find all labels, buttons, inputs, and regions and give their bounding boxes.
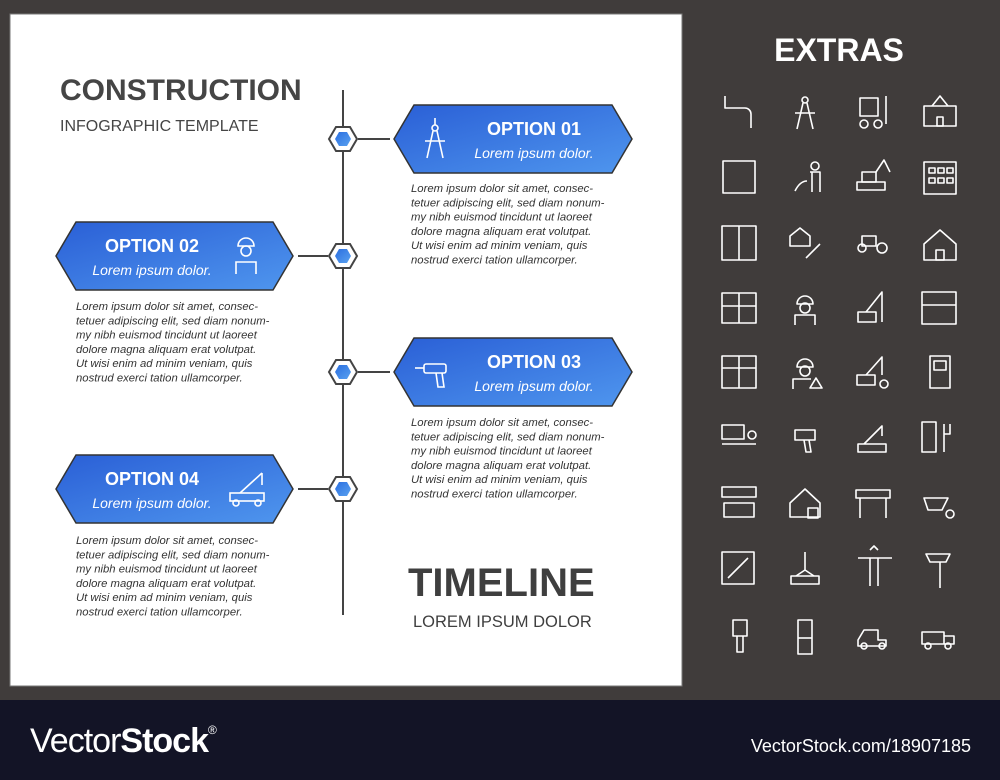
text block 01: tetuer adipiscing elit, sed diam nonum-	[411, 197, 605, 209]
text block 02: Lorem ipsum dolor sit amet, consec-	[76, 301, 258, 313]
text block 04	[76, 535, 270, 618]
title: INFOGRAPHIC TEMPLATE	[60, 118, 259, 135]
text block 04: dolore magna aliquam erat volutpat.	[76, 578, 256, 590]
text block 02	[76, 301, 270, 384]
text block 01: my nibh euismod tincidunt ut laoreet	[411, 212, 593, 224]
icon: compass	[425, 118, 445, 158]
text block 03	[411, 417, 605, 500]
text block 04: Ut wisi enim ad minim veniam, quis	[76, 592, 253, 604]
title	[60, 74, 302, 135]
icon grid: extras	[722, 96, 956, 654]
icon: worker	[236, 238, 256, 274]
option 03: OPTION 03	[487, 352, 581, 372]
text block 03: nostrud exerci tation ullamcorper.	[411, 488, 578, 500]
footer bar: ®	[208, 723, 217, 737]
text block 03: my nibh euismod tincidunt ut laoreet	[411, 446, 593, 458]
option 03: Lorem ipsum dolor.	[474, 378, 594, 394]
option 01	[394, 105, 632, 173]
text block 04: my nibh euismod tincidunt ut laoreet	[76, 564, 258, 576]
text block 01: Ut wisi enim ad minim veniam, quis	[411, 240, 588, 252]
option 02: OPTION 02	[105, 236, 199, 256]
extras heading: EXTRAS	[774, 32, 904, 68]
text block 03: Ut wisi enim ad minim veniam, quis	[411, 474, 588, 486]
option 04: Lorem ipsum dolor.	[92, 495, 212, 511]
timeline heading: LOREM IPSUM DOLOR	[413, 613, 592, 631]
text block 03: dolore magna aliquam erat volutpat.	[411, 460, 591, 472]
footer bar: VectorStock.com/18907185	[751, 736, 971, 756]
option 04: OPTION 04	[105, 469, 199, 489]
icon: crane truck	[230, 473, 264, 506]
option 02	[56, 222, 293, 290]
text block 04: Lorem ipsum dolor sit amet, consec-	[76, 535, 258, 547]
text block 04: tetuer adipiscing elit, sed diam nonum-	[76, 549, 270, 561]
timeline heading	[408, 561, 595, 631]
option 02: Lorem ipsum dolor.	[92, 262, 212, 278]
title: CONSTRUCTION	[60, 74, 302, 107]
timeline axis	[298, 90, 390, 615]
text block 02: Ut wisi enim ad minim veniam, quis	[76, 358, 253, 370]
text block 03: Lorem ipsum dolor sit amet, consec-	[411, 417, 593, 429]
footer bar: VectorStock	[30, 722, 208, 760]
text block 02: my nibh euismod tincidunt ut laoreet	[76, 330, 258, 342]
timeline nodes	[329, 127, 357, 501]
text block 01: Lorem ipsum dolor sit amet, consec-	[411, 183, 593, 195]
text block 01: nostrud exerci tation ullamcorper.	[411, 254, 578, 266]
text block 02: dolore magna aliquam erat volutpat.	[76, 344, 256, 356]
text block 02: nostrud exerci tation ullamcorper.	[76, 372, 243, 384]
option 01: OPTION 01	[487, 119, 581, 139]
text block 04: nostrud exerci tation ullamcorper.	[76, 606, 243, 618]
text block 01	[411, 183, 605, 266]
option 04	[56, 455, 293, 523]
footer bar	[0, 700, 1000, 780]
text block 03: tetuer adipiscing elit, sed diam nonum-	[411, 431, 605, 443]
option 01: Lorem ipsum dolor.	[474, 145, 594, 161]
option 03	[394, 338, 632, 406]
panel: main white	[10, 14, 682, 686]
icon: drill	[415, 364, 446, 387]
text block 02: tetuer adipiscing elit, sed diam nonum-	[76, 315, 270, 327]
timeline heading: TIMELINE	[408, 561, 595, 605]
text block 01: dolore magna aliquam erat volutpat.	[411, 226, 591, 238]
